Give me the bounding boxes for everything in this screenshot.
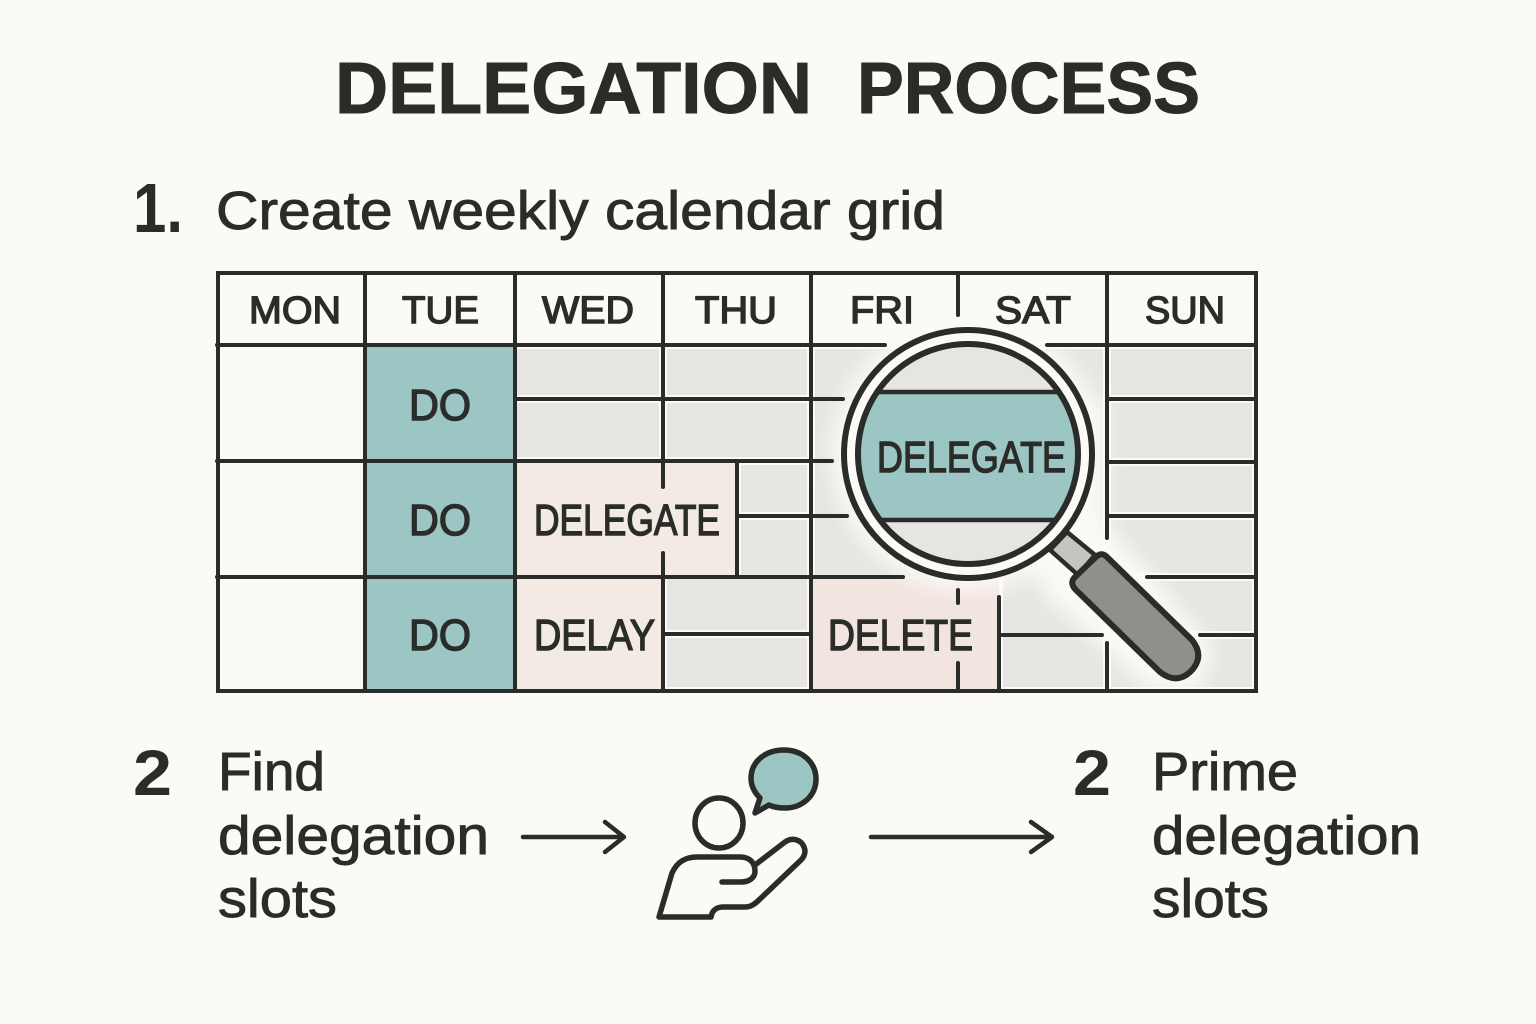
icon: magnifying glass <box>844 330 1198 678</box>
head <box>695 798 743 848</box>
day headers: WED <box>542 290 634 332</box>
step number: 2 <box>1073 737 1111 809</box>
cell labels: DO <box>409 496 471 545</box>
handle grip <box>1072 554 1198 678</box>
arrow: to person icon <box>523 822 624 852</box>
step text: slots <box>218 869 337 929</box>
inner ring <box>858 344 1078 564</box>
cell labels: DELEGATE <box>534 496 720 545</box>
step 1 heading <box>133 169 945 247</box>
day headers: FRI <box>850 290 914 332</box>
title <box>335 49 1200 129</box>
step 2: prime delegation slots <box>1073 737 1421 929</box>
lens contents <box>861 347 1075 561</box>
step text: Prime <box>1152 742 1298 802</box>
cell labels: DO <box>409 381 471 430</box>
step 2: find delegation slots <box>133 737 489 929</box>
step 1 label: Create weekly calendar grid <box>216 181 945 241</box>
day headers: TUE <box>402 290 479 332</box>
grid lines <box>217 273 1256 691</box>
DELAY cell <box>517 578 663 691</box>
magnified DELEGATE label: DELEGATE <box>877 433 1066 482</box>
day headers <box>249 290 1225 332</box>
grey free-time cells <box>517 347 1256 691</box>
day headers: SAT <box>995 290 1071 332</box>
body and hand <box>659 839 805 917</box>
cell labels: DELAY <box>534 611 655 660</box>
panel: weekly calendar grid <box>217 273 1256 695</box>
step text: delegation <box>1152 806 1421 866</box>
title: PROCESS <box>857 49 1200 129</box>
step text: slots <box>1152 869 1269 929</box>
step text: Find <box>218 742 325 802</box>
lens ring <box>844 330 1092 578</box>
cell labels: DO <box>409 611 471 660</box>
icon: person with speech bubble <box>659 750 816 917</box>
day headers: SUN <box>1145 290 1225 332</box>
handle neck <box>1050 532 1095 575</box>
step text <box>218 742 489 929</box>
arrow: to prime slots <box>871 822 1052 852</box>
step text <box>1152 742 1421 929</box>
outer border <box>218 273 1256 691</box>
day headers: THU <box>695 290 777 332</box>
speech bubble <box>751 750 816 813</box>
step 1 number: 1. <box>133 169 183 247</box>
white halo around magnifier <box>832 318 1215 695</box>
light gaps between grey cells <box>515 345 1256 691</box>
DELETE cell <box>811 578 999 691</box>
step number: 2 <box>133 737 172 809</box>
day headers: MON <box>249 290 341 332</box>
DELEGATE cell <box>517 463 737 577</box>
title: DELEGATION <box>335 49 812 129</box>
cell labels: DELETE <box>828 611 973 660</box>
step text: delegation <box>218 806 489 866</box>
TUE column: DO cells <box>366 347 515 691</box>
cell labels <box>409 381 973 660</box>
